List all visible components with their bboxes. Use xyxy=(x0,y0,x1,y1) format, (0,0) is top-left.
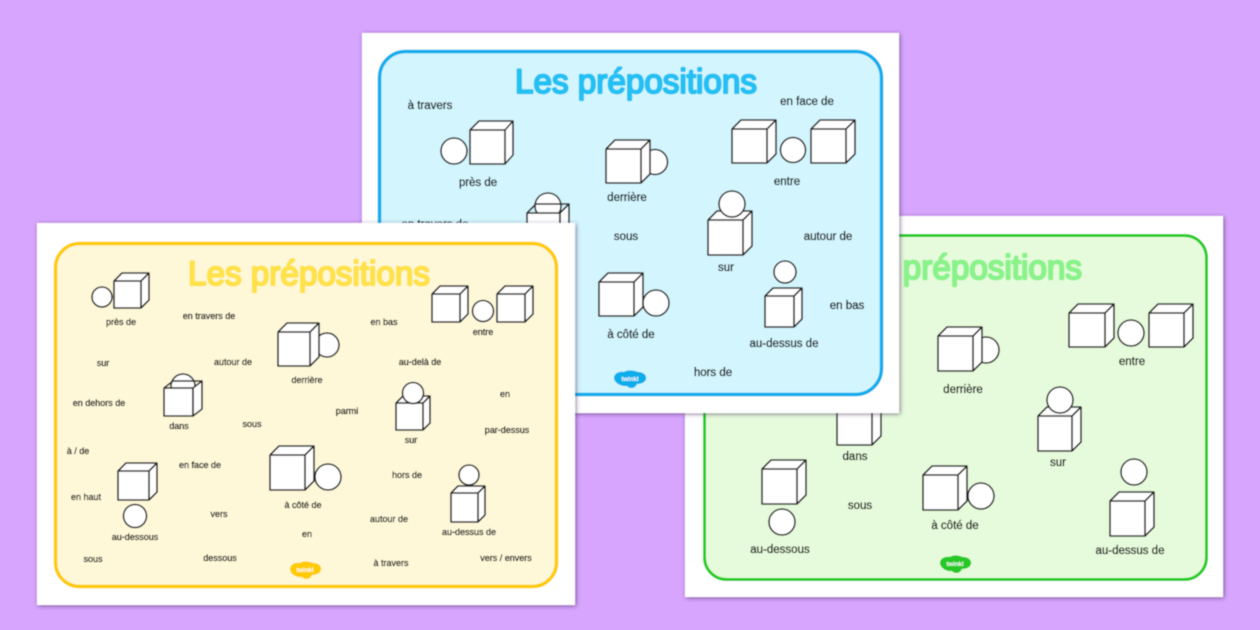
label: parmi: parmi xyxy=(336,406,358,416)
heading: blue title: Les prépositions xyxy=(515,63,757,101)
label: entre: entre xyxy=(774,176,800,188)
heading: green title: Les prépositions xyxy=(840,249,1082,287)
label: autour de: autour de xyxy=(214,357,252,367)
icon: sur xyxy=(396,382,430,430)
panel: green worksheet xyxy=(685,216,1223,597)
panel: blue worksheet xyxy=(362,33,899,413)
label: à côté de: à côté de xyxy=(607,329,655,341)
label: dans: dans xyxy=(843,451,868,463)
icon: à côté de xyxy=(599,273,669,316)
heading: yellow title: Les prépositions xyxy=(188,255,430,293)
label: près de: près de xyxy=(106,317,136,327)
label: au-dessous: au-dessous xyxy=(112,532,159,542)
yellow rounded panel xyxy=(56,244,556,586)
label: derrière: derrière xyxy=(291,375,323,385)
blue rounded panel xyxy=(380,52,882,394)
icon: entre xyxy=(1069,304,1193,347)
icon: twinkl logo green xyxy=(940,555,971,573)
label: en dehors de: en dehors de xyxy=(73,398,125,408)
icon: près de xyxy=(92,273,149,308)
label: sous: sous xyxy=(614,231,638,243)
icon: dans xyxy=(527,193,569,243)
icon: entre xyxy=(732,120,855,163)
label: en haut: en haut xyxy=(71,492,102,502)
icon: twinkl logo yellow: twinkl xyxy=(296,568,314,574)
label: vers / envers: vers / envers xyxy=(480,553,532,563)
label: sur: sur xyxy=(718,262,734,274)
label: près de: près de xyxy=(459,177,497,189)
label: en travers de: en travers de xyxy=(401,219,469,231)
label: en face de: en face de xyxy=(780,96,834,108)
icon: au-dessus de xyxy=(1110,459,1154,536)
label: autour de: autour de xyxy=(370,514,408,524)
icon: sur xyxy=(708,191,752,255)
green sheet background xyxy=(685,216,1223,597)
label: hors de: hors de xyxy=(694,367,732,379)
label: sous: sous xyxy=(848,500,872,512)
label: derrière: derrière xyxy=(607,192,647,204)
icon: au-dessous xyxy=(118,463,157,528)
label: en bas: en bas xyxy=(370,317,398,327)
label: sous: sous xyxy=(242,419,262,429)
label: au-dessus de: au-dessus de xyxy=(749,338,819,350)
label: vers: vers xyxy=(210,509,228,519)
icon: sur xyxy=(1038,387,1081,451)
label: en: en xyxy=(500,389,510,399)
icon: au-dessous xyxy=(762,460,806,535)
label: sur: sur xyxy=(97,358,109,368)
icon: dans xyxy=(164,374,202,416)
icon: près de xyxy=(441,121,513,164)
label: à côté de: à côté de xyxy=(931,520,979,532)
label: par-dessus: par-dessus xyxy=(485,425,530,435)
green rounded panel xyxy=(704,236,1206,580)
label: dessous: dessous xyxy=(203,553,237,563)
label: au-delà de: au-delà de xyxy=(399,357,441,367)
icon: twinkl logo green: twinkl xyxy=(946,562,964,568)
icon: derrière xyxy=(278,323,339,366)
label: à travers: à travers xyxy=(373,558,409,568)
label: en travers de: en travers de xyxy=(183,311,235,321)
label: à travers: à travers xyxy=(408,100,453,112)
icon: au-dessus de xyxy=(765,261,802,327)
icon: derrière xyxy=(606,140,668,183)
icon: à côté de xyxy=(923,466,994,510)
icon: entre xyxy=(432,286,533,322)
blue sheet background xyxy=(362,33,899,413)
label: à côté de: à côté de xyxy=(284,500,322,510)
icon: twinkl logo yellow xyxy=(290,561,321,579)
label: au-dessus de: au-dessus de xyxy=(1095,545,1165,557)
icon: derrière xyxy=(938,327,999,371)
icon: au-dessus de xyxy=(451,465,485,522)
label: autour de: autour de xyxy=(804,231,852,243)
label: hors de: hors de xyxy=(392,470,422,480)
label: sous: sous xyxy=(83,554,103,564)
icon: à côté de xyxy=(270,446,341,490)
icon: twinkl logo blue xyxy=(614,370,646,388)
label: en: en xyxy=(302,529,312,539)
yellow sheet background xyxy=(37,223,575,605)
label: dans: dans xyxy=(169,421,189,431)
label: entre: entre xyxy=(1119,356,1145,368)
label: au-dessous: au-dessous xyxy=(750,544,810,556)
label: sur: sur xyxy=(405,435,417,445)
label: en face de: en face de xyxy=(179,460,221,470)
label: sur: sur xyxy=(1050,457,1066,469)
icon: dans xyxy=(837,401,881,445)
panel: yellow worksheet xyxy=(37,223,575,605)
label: entre: entre xyxy=(473,327,493,337)
label: à / de: à / de xyxy=(67,446,89,456)
label: en bas: en bas xyxy=(830,300,865,312)
label: derrière: derrière xyxy=(943,384,983,396)
icon: twinkl logo blue: twinkl xyxy=(621,377,639,383)
label: au-dessus de: au-dessus de xyxy=(442,527,496,537)
